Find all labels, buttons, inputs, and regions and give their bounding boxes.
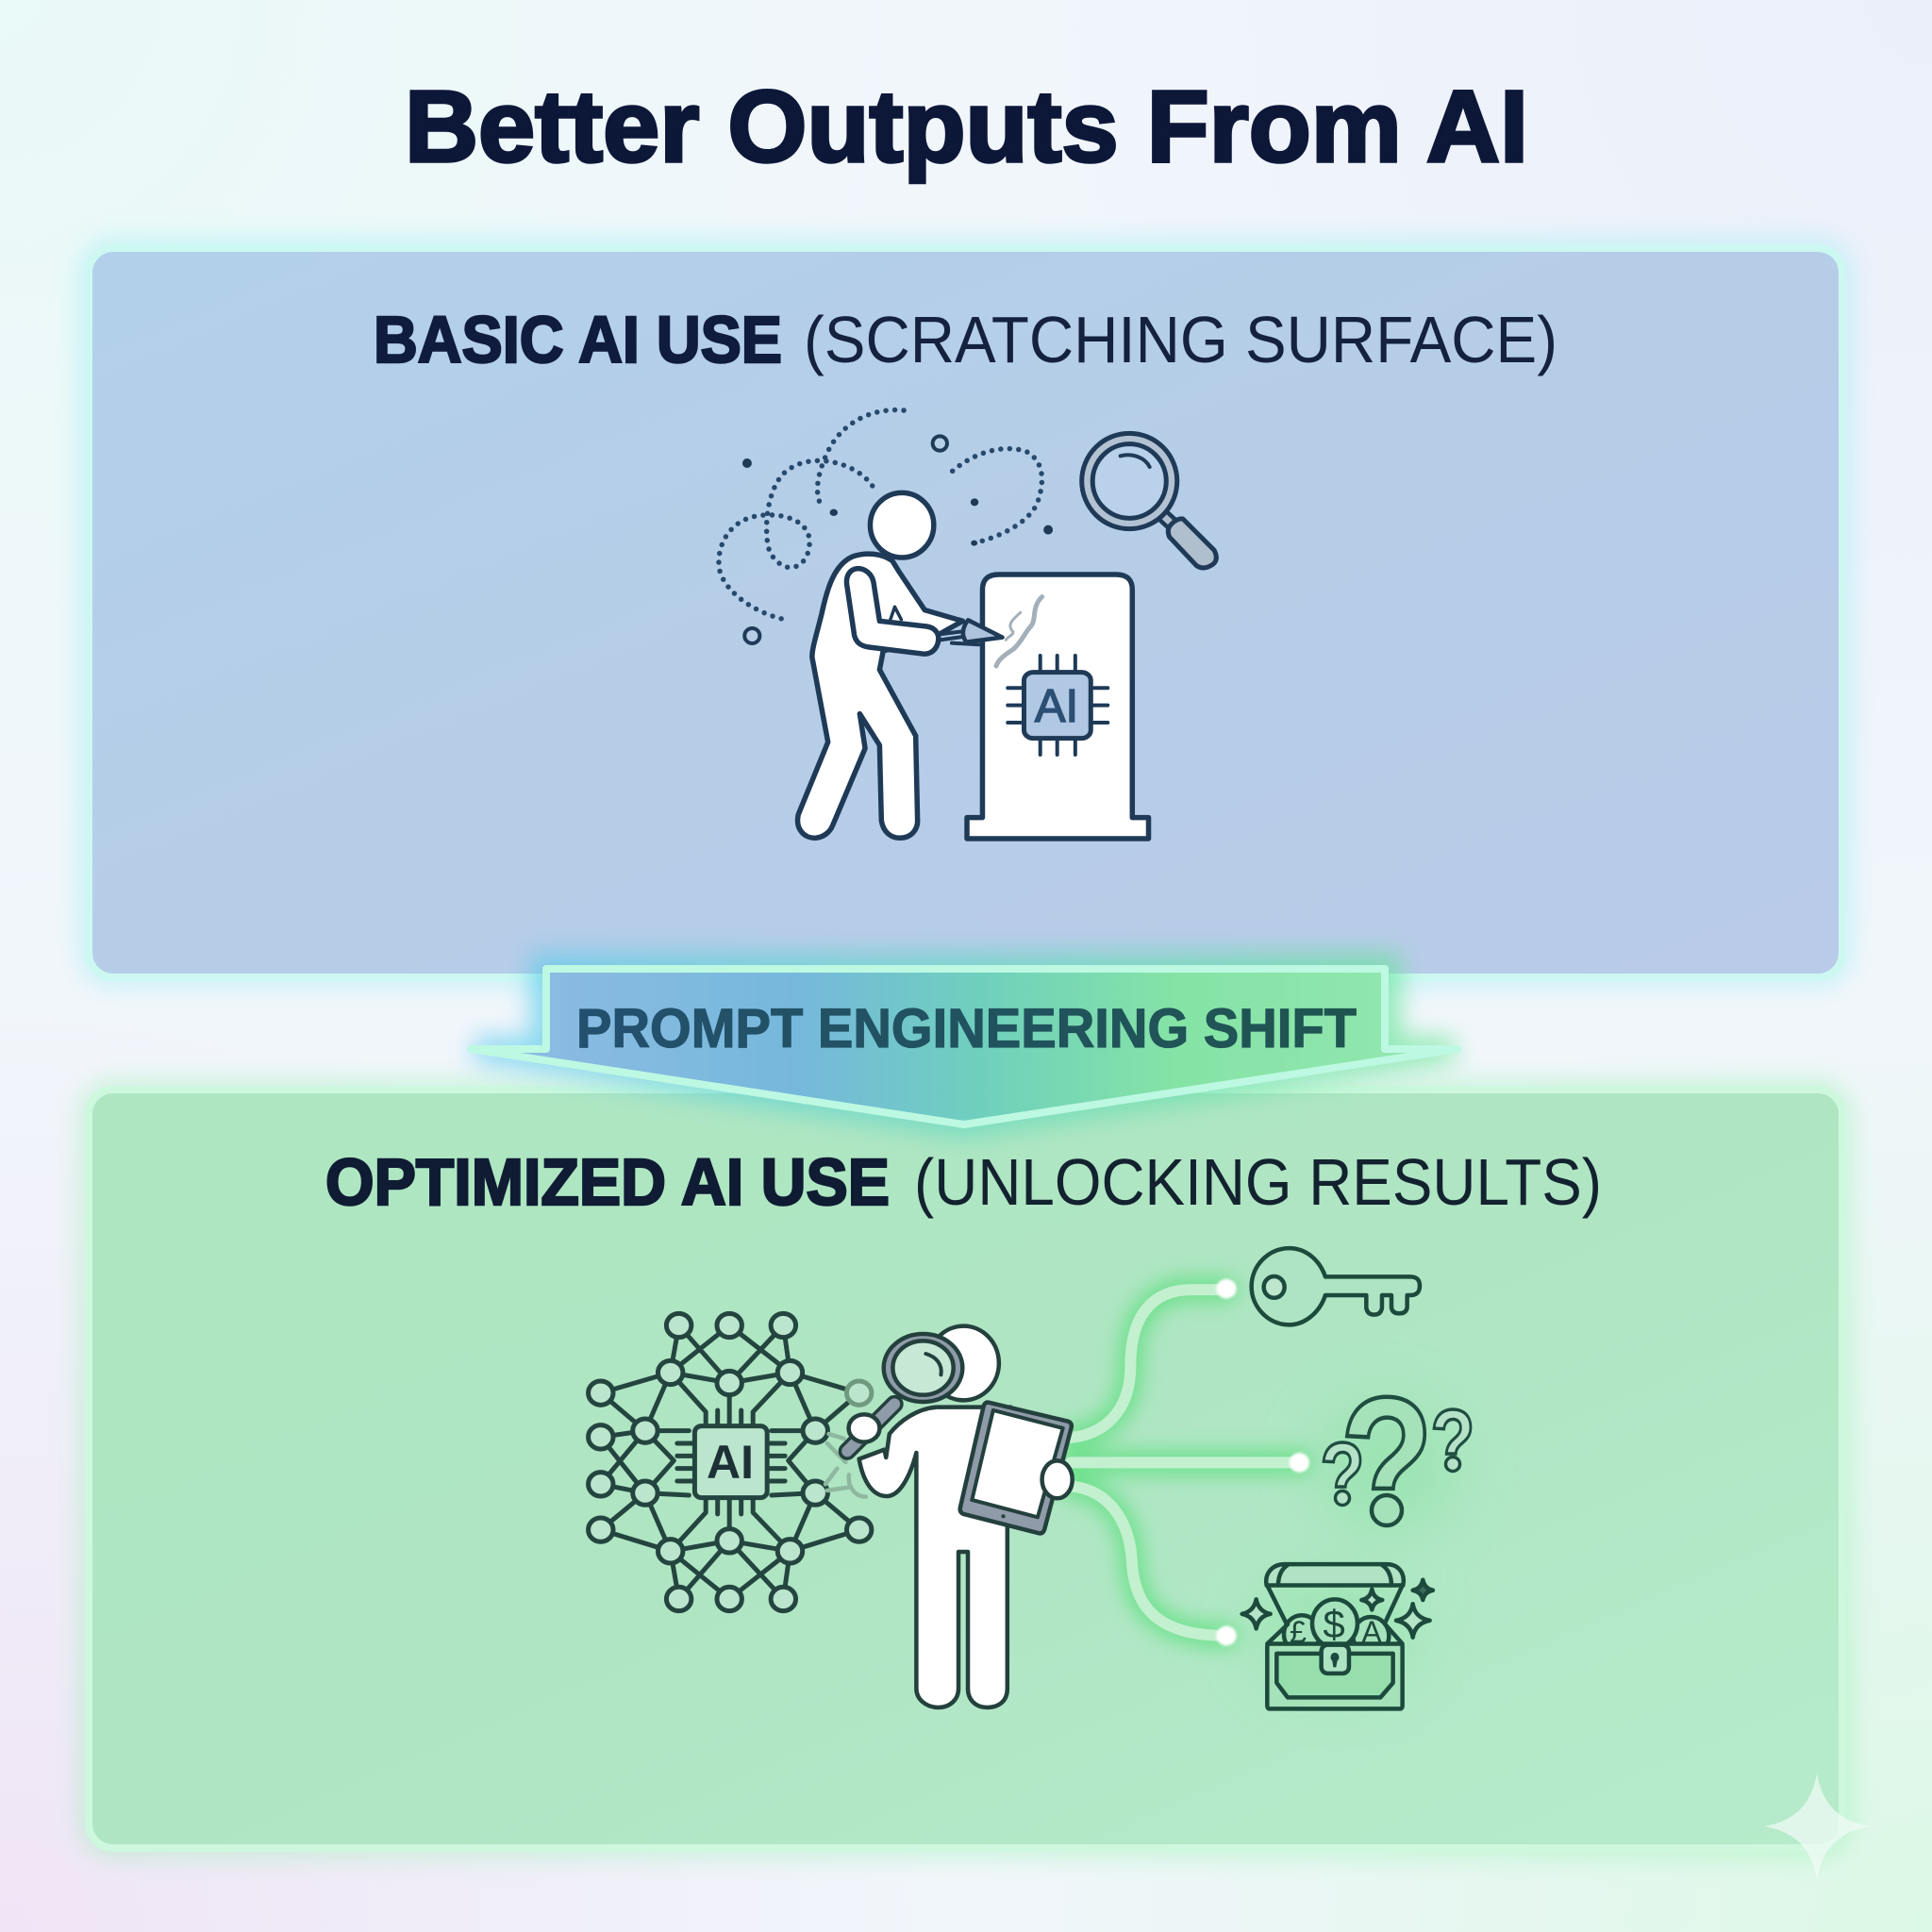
heading: optimized AI use	[325, 1145, 1602, 1219]
heading: optimized AI use: (UNLOCKING RESULTS)	[914, 1145, 1602, 1219]
AI chip label: AI	[707, 1436, 754, 1489]
AI chip body	[694, 1426, 767, 1498]
soft green glow behind result icons	[1255, 1401, 1457, 1689]
icon: question marks: ?	[1321, 1424, 1364, 1525]
banner label: PROMPT ENGINEERING SHIFT	[576, 998, 1357, 1059]
chip label: AI	[1035, 681, 1078, 732]
illustration: person with magnifier and tablet	[847, 1326, 1073, 1707]
cracks	[996, 597, 1042, 666]
chest body	[1267, 1624, 1403, 1644]
monolith	[967, 575, 1149, 839]
panel: basic AI use	[89, 248, 1842, 977]
title: Better Outputs From AI	[405, 69, 1528, 183]
gripping hand	[849, 1414, 879, 1442]
chest lid	[1266, 1564, 1404, 1586]
coin symbols	[1290, 1602, 1382, 1649]
magnifying glass	[847, 1334, 962, 1451]
chest lock	[1322, 1645, 1349, 1674]
icon: key	[1252, 1248, 1420, 1324]
coins	[1281, 1597, 1391, 1641]
coin symbols: A	[1361, 1615, 1382, 1649]
body	[859, 1407, 1010, 1707]
sparkles	[1242, 1580, 1433, 1638]
network nodes	[589, 1313, 872, 1611]
heading: basic AI use: (SCRATCHING SURFACE)	[804, 303, 1557, 376]
coin symbols: £	[1290, 1615, 1307, 1649]
heading: basic AI use	[374, 303, 1557, 376]
tablet hand	[1042, 1460, 1073, 1498]
shirt fold	[891, 607, 901, 620]
network edges	[601, 1325, 859, 1599]
magnifying glass	[1082, 433, 1216, 568]
sparkle watermark	[1764, 1774, 1870, 1879]
AI chip	[1024, 673, 1091, 739]
chisel	[938, 620, 1003, 644]
AI chip pins	[1008, 656, 1108, 755]
dotted scribbles	[719, 410, 1041, 620]
person	[870, 492, 934, 558]
heading: basic AI use: BASIC AI USE	[374, 303, 782, 376]
icon: treasure chest	[1242, 1564, 1433, 1708]
icon: question marks: ?	[1431, 1391, 1474, 1492]
tablet	[960, 1403, 1072, 1533]
coin symbols: $	[1323, 1602, 1345, 1646]
arrow banner: prompt engineering shift	[471, 965, 1457, 1125]
arm	[846, 569, 939, 654]
icon: question marks: ?	[1340, 1359, 1434, 1568]
heading: optimized AI use: OPTIMIZED AI USE	[325, 1145, 890, 1219]
head	[928, 1326, 999, 1400]
glowing connector ends	[1216, 1279, 1309, 1645]
connectors: glowing paths to results	[1071, 1279, 1309, 1645]
panel: optimized AI use	[89, 1090, 1870, 1879]
faded edges behind the lens	[825, 1434, 866, 1497]
illustration: person chiselling AI monolith	[719, 410, 1216, 839]
scattered dots and rings	[742, 436, 1053, 643]
illustration: neural network with AI chip	[589, 1313, 872, 1611]
icon: question marks	[1322, 1394, 1472, 1528]
